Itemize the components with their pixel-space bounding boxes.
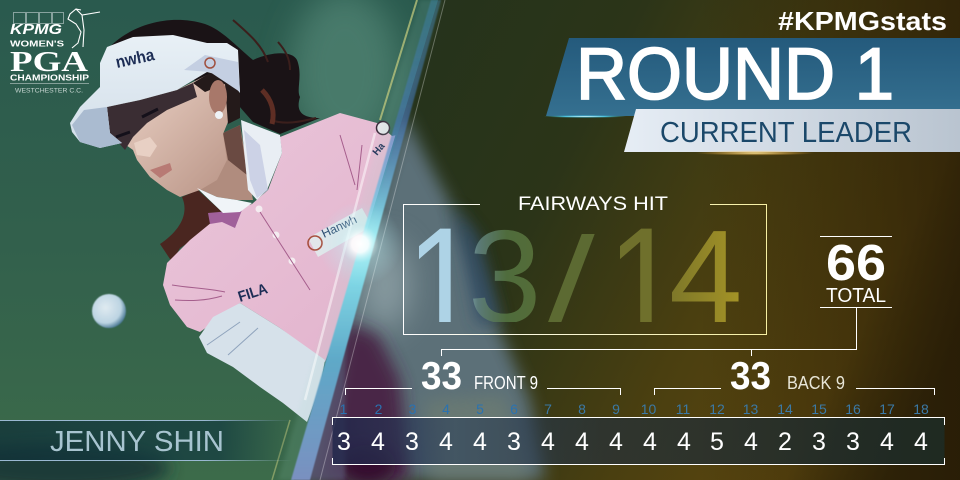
KPMG blocks (14, 12, 64, 24)
blue ribbon (546, 38, 960, 116)
hair strands (233, 20, 316, 123)
neck shadow (223, 125, 247, 175)
scores: 4 (609, 428, 623, 456)
ear (209, 80, 227, 114)
face shadow (107, 83, 197, 150)
hole numbers: 2 (375, 401, 383, 417)
shirt (163, 113, 420, 362)
shoulder badge (376, 122, 390, 134)
golfer photo (70, 20, 420, 422)
buttons (256, 206, 296, 264)
right panel background (294, 0, 960, 480)
scores: 3 (405, 428, 419, 456)
shirt sponsor text: Hanwh (319, 212, 359, 241)
scores: 3 (812, 428, 826, 456)
value (406, 196, 742, 370)
hole numbers: 11 (676, 401, 690, 417)
hole numbers: 17 (879, 401, 895, 417)
visor (70, 35, 240, 148)
blurred flag: lower grey (425, 395, 530, 480)
visor badge (205, 58, 215, 68)
scores: 4 (880, 428, 894, 456)
connector arrows (442, 308, 856, 356)
value: 33 (730, 355, 771, 398)
cyan glint (543, 115, 627, 118)
visor strap (184, 55, 240, 92)
shirt neck shadow (208, 210, 242, 228)
hole numbers: 16 (845, 401, 861, 417)
golf ball (92, 294, 126, 328)
hole numbers: 3 (409, 401, 417, 417)
scores: 5 (710, 428, 724, 456)
silver ribbon (624, 109, 960, 152)
scores: 4 (473, 428, 487, 456)
lens flare (318, 202, 402, 286)
bracket (346, 388, 620, 395)
shirt sponsor logo (308, 236, 322, 250)
earring (215, 111, 223, 119)
hair (105, 20, 320, 134)
shirt folds (172, 135, 362, 301)
hole numbers: 4 (442, 401, 450, 417)
background: dark patch (0, 444, 170, 480)
visor underside (72, 107, 122, 148)
bracket (654, 388, 934, 395)
label: FRONT 9 (474, 373, 538, 393)
hole numbers: 7 (544, 401, 552, 417)
hair lower (160, 190, 222, 262)
label: BACK 9 (787, 373, 845, 393)
diagonal light strip (272, 0, 445, 480)
heading: FAIRWAYS HIT (518, 194, 668, 215)
blurred flag: pale patch (360, 240, 410, 330)
scorecard bar (332, 418, 944, 464)
value: 33 (421, 355, 462, 398)
blurred flag: lavender edge (298, 345, 345, 480)
blurred flag: grey body (290, 115, 545, 480)
total (820, 234, 892, 308)
hole numbers: 8 (578, 401, 586, 417)
scores: 4 (643, 428, 657, 456)
collar (241, 120, 282, 200)
golfer silhouette (68, 9, 100, 48)
scores: 4 (541, 428, 555, 456)
hole numbers: 9 (612, 401, 620, 417)
scores: 4 (677, 428, 691, 456)
shoulder sponsor text: Ha (371, 141, 388, 158)
lips (150, 163, 172, 178)
scores: 3 (337, 428, 351, 456)
collar shade (244, 130, 268, 198)
hole numbers: 6 (510, 401, 518, 417)
name band (0, 420, 292, 461)
scores: 3 (507, 428, 521, 456)
front 9 summary (346, 355, 620, 398)
hole numbers: 13 (743, 401, 758, 417)
hole numbers: 12 (709, 401, 725, 417)
hair side (193, 70, 240, 124)
scores: 4 (371, 428, 385, 456)
total value: 66 (826, 234, 886, 291)
value: 1 (608, 196, 680, 370)
scores: 2 (778, 428, 792, 456)
value: 1 (406, 196, 479, 370)
hair red tint (262, 90, 273, 124)
scores: 3 (846, 428, 860, 456)
round banner (543, 34, 960, 156)
box frame (404, 204, 766, 334)
back 9 summary (654, 355, 934, 398)
KPMG wordmark: KPMG (10, 21, 62, 38)
collar lower (197, 188, 252, 213)
hashtag: #KPMGstats (778, 6, 947, 36)
logo: KPMG Women's PGA Championship (10, 9, 100, 94)
current leader: CURRENT LEADER (660, 117, 912, 149)
value: 3 (468, 203, 541, 350)
eyes (116, 109, 158, 137)
round heading: ROUND 1 (576, 34, 894, 115)
Women's: WOMEN'S (10, 38, 64, 48)
scores: 4 (439, 428, 453, 456)
FILA logo: FILA (236, 280, 270, 306)
hole numbers: 14 (777, 401, 793, 417)
hole numbers (340, 401, 929, 417)
shirt sponsor pill (308, 208, 372, 257)
gold glint (695, 150, 815, 156)
blurred flag: shadow edge (452, 205, 500, 325)
face (107, 75, 230, 197)
value: / (548, 212, 595, 346)
value: 4 (669, 203, 742, 350)
sleeve (199, 303, 325, 422)
hole numbers: 15 (811, 401, 827, 417)
Championship: CHAMPIONSHIP (10, 72, 89, 82)
hole numbers: 18 (913, 401, 929, 417)
PGA: PGA (10, 46, 88, 78)
hole numbers: 10 (641, 401, 656, 417)
scores (337, 428, 928, 456)
total label: TOTAL (826, 285, 886, 307)
stat box: fairways hit (404, 194, 766, 370)
scores: 4 (744, 428, 758, 456)
sleeve folds (207, 322, 258, 355)
visor brand: nwha (114, 45, 156, 72)
scores: 4 (575, 428, 589, 456)
neck (197, 125, 253, 200)
hole numbers: 5 (476, 401, 484, 417)
Westchester: WESTCHESTER C.C. (15, 88, 83, 94)
nose (134, 137, 157, 157)
blurred flag: deep maroon (340, 445, 396, 480)
background: light near strip (290, 0, 400, 150)
player name: JENNY SHIN (50, 426, 224, 458)
hole numbers: 1 (340, 401, 348, 417)
scores: 4 (914, 428, 928, 456)
blurred flag: maroon part (320, 322, 410, 480)
